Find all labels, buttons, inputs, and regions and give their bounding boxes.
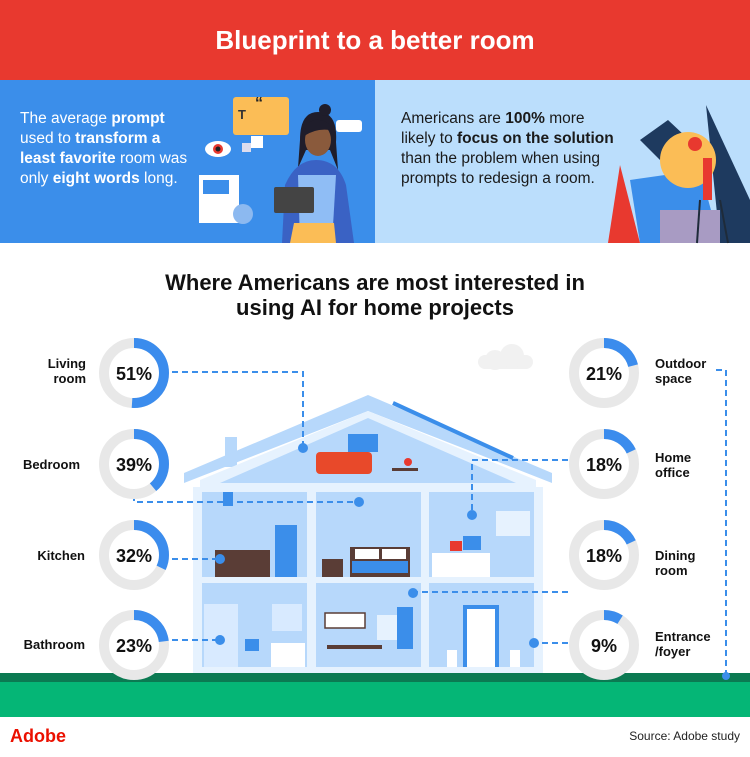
- heading: Where Americans are most interested in: [165, 270, 585, 295]
- header banner: [0, 0, 750, 80]
- panel: prompt length: [0, 80, 375, 243]
- donut: outdoor space 21%: 21%: [586, 364, 622, 384]
- source note: Source: Adobe study: [629, 729, 740, 743]
- illustration: woman with tablet: T: [238, 107, 246, 122]
- donut: kitchen 32%: [37, 525, 164, 585]
- kitchen: [223, 492, 233, 506]
- illustration: woman with tablet: “: [255, 95, 263, 112]
- donut: bathroom 23%: [24, 615, 164, 675]
- donut: dining room 18%: [574, 525, 695, 585]
- text: prompt stat: least favorite room was: [20, 150, 187, 167]
- donut: bedroom 39%: Bedroom: [23, 457, 80, 472]
- text: solution stat: prompts to redesign a room.: [401, 170, 595, 187]
- donut: bedroom 39%: 39%: [116, 455, 152, 475]
- donut: home office 18%: [574, 434, 691, 494]
- donut: kitchen 32%: 32%: [116, 546, 152, 566]
- donut: entrance 9%: /foyer: [655, 644, 690, 659]
- text: solution stat: likely to focus on the solution: [401, 130, 614, 147]
- cloud: [478, 344, 533, 370]
- connector lines: [134, 370, 726, 676]
- heading: using AI for home projects: [236, 295, 514, 320]
- text: prompt stat: [20, 110, 187, 187]
- donut: dining room 18%: room: [655, 563, 688, 578]
- donut: entrance 9%: Entrance: [655, 629, 711, 644]
- living room lower: [325, 613, 365, 628]
- donut: bedroom 39%: [23, 434, 164, 494]
- illustration: woman with tablet: [199, 95, 362, 243]
- illustration: ladder art: [608, 105, 750, 243]
- donut: dining room 18%: Dining: [655, 548, 695, 563]
- donut: living room 51%: Living: [48, 356, 86, 371]
- text: solution stat: Americans are 100% more: [401, 110, 585, 127]
- donut: entrance 9%: [574, 615, 711, 675]
- panel: solution focus: [375, 80, 750, 243]
- text: solution stat: than the problem when using: [401, 150, 600, 167]
- donut: home office 18%: 18%: [586, 455, 622, 475]
- donut: outdoor space 21%: [574, 343, 706, 403]
- ground: [0, 673, 750, 717]
- office: [496, 511, 530, 536]
- text: prompt stat: only eight words long.: [20, 170, 178, 187]
- donut: bathroom 23%: Bathroom: [24, 637, 85, 652]
- title: Blueprint to a better room: [215, 25, 535, 55]
- bedroom: [322, 559, 343, 577]
- text: prompt stat: used to transform a: [20, 130, 161, 147]
- logo: Adobe: Adobe: [10, 726, 66, 746]
- donut: bathroom 23%: 23%: [116, 636, 152, 656]
- donut: entrance 9%: 9%: [591, 636, 617, 656]
- donut: kitchen 32%: Kitchen: [37, 548, 85, 563]
- attic: sofa: [348, 434, 378, 452]
- house illustration: [184, 395, 552, 673]
- bathroom: [204, 604, 238, 667]
- donut: outdoor space 21%: Outdoor: [655, 356, 706, 371]
- entrance: [463, 605, 499, 667]
- donut: outdoor space 21%: space: [655, 371, 692, 386]
- donut: living room 51%: room: [54, 371, 86, 386]
- donut: home office 18%: office: [655, 465, 690, 480]
- donut: dining room 18%: 18%: [586, 546, 622, 566]
- text: prompt stat: The average prompt: [20, 110, 165, 127]
- donut: home office 18%: Home: [655, 450, 691, 465]
- donut: living room 51%: 51%: [116, 364, 152, 384]
- heading: [165, 270, 585, 320]
- donut: living room 51%: [48, 343, 164, 403]
- text: solution stat: [401, 110, 614, 187]
